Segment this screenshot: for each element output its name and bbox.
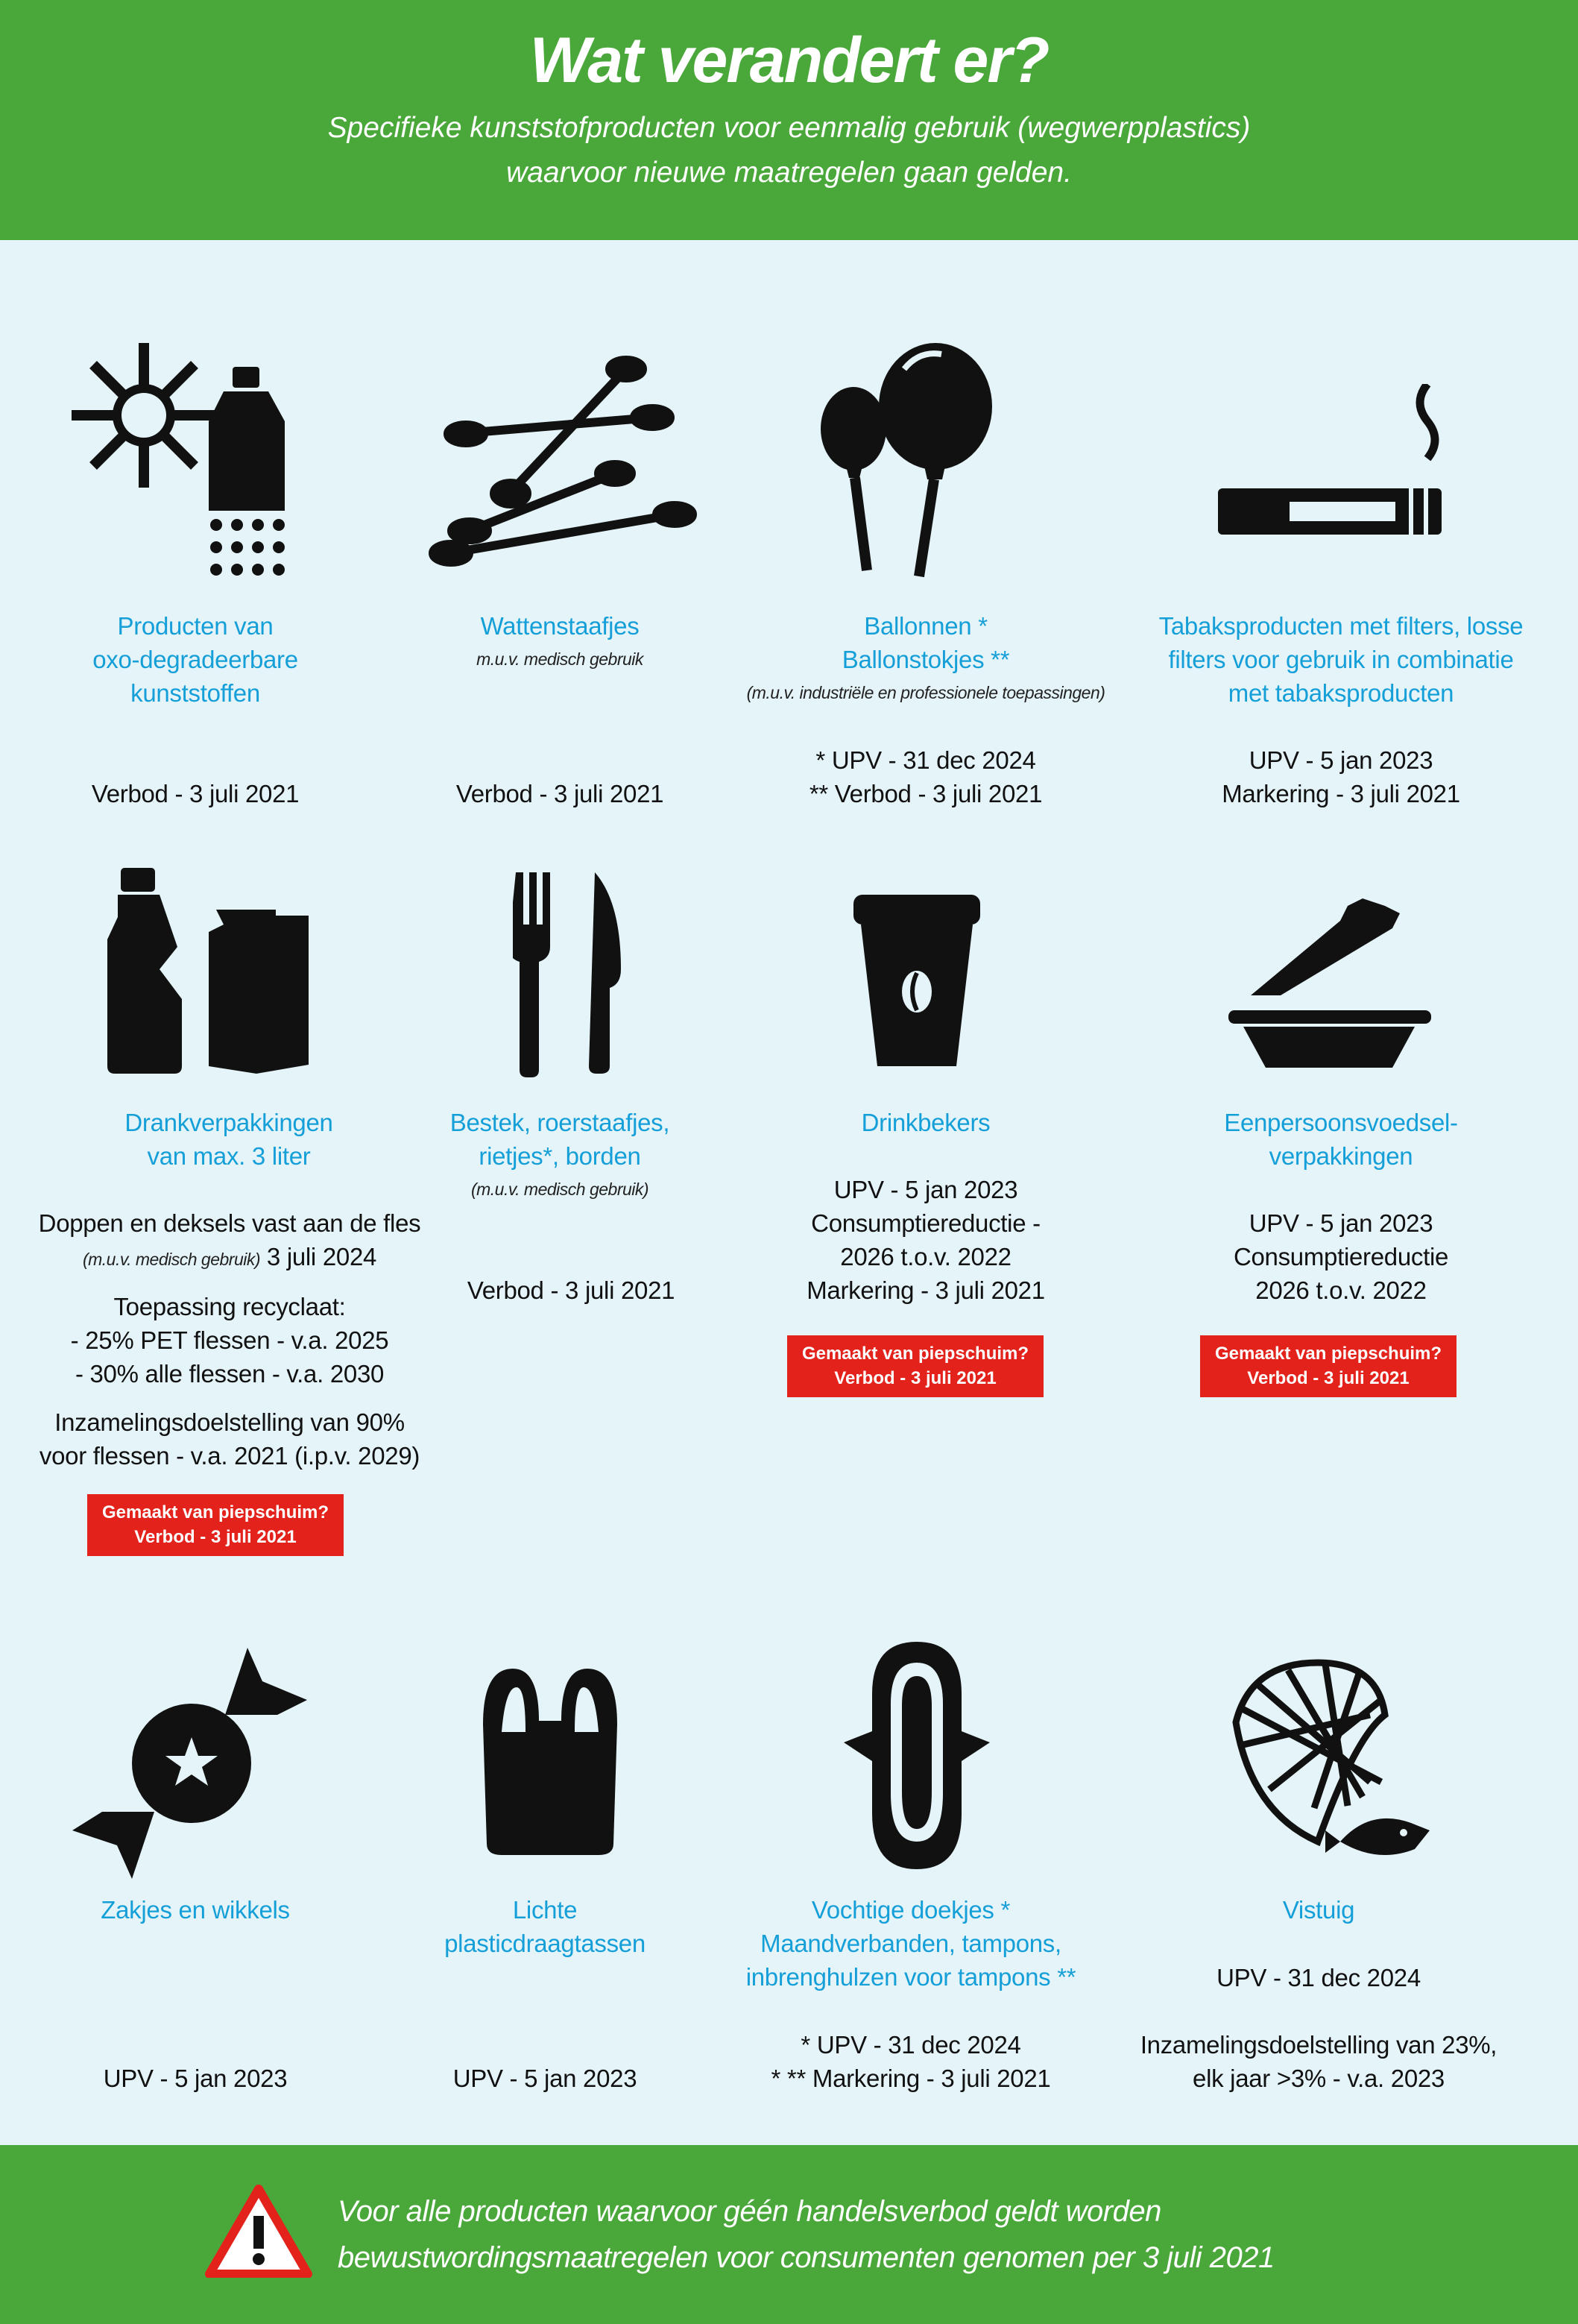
text col3 row1: Ballonnen * — [864, 612, 988, 640]
red callout col4: Verbod - 3 juli 2021 — [1247, 1368, 1410, 1388]
status col3 row1: ** Verbod - 3 juli 2021 — [809, 780, 1042, 807]
text col3 row3: inbrenghulzen voor tampons ** — [746, 1963, 1076, 1991]
icon: fork and knife — [513, 872, 621, 1077]
red callout col1 — [87, 1494, 344, 1556]
status col4 row2: UPV - 5 jan 2023 — [1249, 1209, 1433, 1237]
status col3 row2: Consumptiereductie - — [811, 1209, 1041, 1237]
text col1 row3: Zakjes en wikkels — [101, 1896, 290, 1924]
details col1 row2: Toepassing recyclaat: — [113, 1293, 346, 1320]
details col1 row2: voor flessen - v.a. 2021 (i.p.v. 2029) — [40, 1442, 420, 1470]
red callout col4 — [1200, 1335, 1457, 1397]
text col2 row1: m.u.v. medisch gebruik — [476, 649, 643, 669]
status col4 row1: UPV - 5 jan 2023 — [1249, 746, 1433, 774]
status col4 row3: UPV - 31 dec 2024 — [1216, 1964, 1421, 1991]
status col3 row2: 2026 t.o.v. 2022 — [840, 1243, 1012, 1270]
icon: food container — [1228, 898, 1431, 1068]
details col1 row2: (m.u.v. medisch gebruik) 3 juli 2024 — [83, 1243, 376, 1270]
text col3 row3: Maandverbanden, tampons, — [760, 1930, 1061, 1957]
text col1 row2: van max. 3 liter — [148, 1142, 310, 1170]
text col2 row2: (m.u.v. medisch gebruik) — [471, 1180, 648, 1199]
text col3 row3: Vochtige doekjes * — [812, 1896, 1010, 1924]
icon: candy — [72, 1648, 307, 1879]
details col1 row2: Doppen en deksels vast aan de fles — [39, 1209, 420, 1237]
icon: sun and bottle — [72, 343, 285, 576]
status col2 row3: UPV - 5 jan 2023 — [453, 2065, 637, 2092]
status col3 row2 — [807, 1176, 1045, 1304]
text col2 row3: plasticdraagtassen — [444, 1930, 646, 1957]
red callout col1: Gemaakt van piepschuim? — [102, 1502, 329, 1522]
details col1 row2: - 30% alle flessen - v.a. 2030 — [75, 1360, 384, 1388]
status col3 row2: Markering - 3 juli 2021 — [807, 1276, 1045, 1304]
text col1 row2 — [124, 1109, 333, 1170]
status col4 row2: 2026 t.o.v. 2022 — [1255, 1276, 1427, 1304]
status col3 row2: UPV - 5 jan 2023 — [834, 1176, 1017, 1203]
subtitle — [328, 112, 1250, 189]
text col2 row2: rietjes*, borden — [479, 1142, 641, 1170]
icon: cup — [853, 895, 980, 1066]
footer text: Voor alle producten waarvoor géén handelsverbod geldt worden — [338, 2195, 1161, 2228]
red callout col1: Verbod - 3 juli 2021 — [134, 1527, 297, 1547]
red callout col4: Gemaakt van piepschuim? — [1215, 1344, 1442, 1364]
status col2 row1: Verbod - 3 juli 2021 — [456, 780, 663, 807]
text col4 row2: Eenpersoonsvoedsel- — [1224, 1109, 1458, 1136]
text col1 row1: kunststoffen — [130, 679, 260, 707]
icon: sanitary pad — [844, 1642, 990, 1869]
status col1 row3: UPV - 5 jan 2023 — [104, 2065, 287, 2092]
status col3 row1 — [809, 746, 1042, 807]
footer text: bewustwordingsmaatregelen voor consumenten genomen per 3 juli 2021 — [338, 2241, 1275, 2274]
text col1 row1: Producten van — [118, 612, 273, 640]
icon: cotton swabs — [429, 356, 697, 567]
text col2 row2: Bestek, roerstaafjes, — [450, 1109, 669, 1136]
text col3 row1 — [747, 612, 1105, 702]
text col2 row1: Wattenstaafjes — [481, 612, 639, 640]
text col3 row2: Drinkbekers — [862, 1109, 990, 1136]
red callout col3: Verbod - 3 juli 2021 — [834, 1368, 997, 1388]
text col2 row1 — [476, 612, 644, 669]
text col4 row1: filters voor gebruik in combinatie — [1168, 646, 1513, 673]
text col4 row3: Vistuig — [1283, 1896, 1354, 1924]
details col1 row2: - 25% PET flessen - v.a. 2025 — [71, 1326, 388, 1354]
text col2 row3 — [444, 1896, 646, 1957]
red callout col3 — [787, 1335, 1044, 1397]
text col1 row1 — [92, 612, 298, 707]
text col4 row1 — [1159, 612, 1523, 707]
header — [0, 0, 1578, 240]
red callout col3: Gemaakt van piepschuim? — [802, 1344, 1029, 1364]
status col4 row1 — [1222, 746, 1460, 807]
icon: bottle and carton — [107, 868, 309, 1074]
subtitle: Specifieke kunststofproducten voor eenmalig gebruik (wegwerpplastics) — [328, 112, 1250, 144]
status col4 row3: Inzamelingsdoelstelling van 23%, — [1140, 2031, 1497, 2059]
text col4 row1: met tabaksproducten — [1228, 679, 1454, 707]
status col4 row1: Markering - 3 juli 2021 — [1222, 780, 1460, 807]
details col1 row2 — [39, 1209, 420, 1470]
icon: cigarette — [1218, 384, 1442, 535]
status col4 row3: elk jaar >3% - v.a. 2023 — [1193, 2065, 1445, 2092]
details col1 row2: Inzamelingsdoelstelling van 90% — [54, 1408, 405, 1436]
status col3 row3: * UPV - 31 dec 2024 — [801, 2031, 1021, 2059]
subtitle: waarvoor nieuwe maatregelen gaan gelden. — [506, 157, 1072, 189]
footer text — [338, 2195, 1275, 2274]
status col4 row2: Consumptiereductie — [1234, 1243, 1448, 1270]
text col3 row1: (m.u.v. industriële en professionele toepassingen) — [747, 683, 1105, 702]
icon: balloons — [821, 343, 992, 577]
icon: fishing net and fish — [1232, 1660, 1430, 1855]
text col4 row1: Tabaksproducten met filters, losse — [1159, 612, 1523, 640]
status col4 row3 — [1140, 1964, 1497, 2092]
text col3 row1: Ballonstokjes ** — [842, 646, 1009, 673]
footer — [0, 2145, 1578, 2324]
status col2 row2: Verbod - 3 juli 2021 — [467, 1276, 675, 1304]
status col3 row1: * UPV - 31 dec 2024 — [815, 746, 1036, 774]
status col3 row3: * ** Markering - 3 juli 2021 — [771, 2065, 1050, 2092]
text col1 row2: Drankverpakkingen — [124, 1109, 333, 1136]
text col1 row1: oxo-degradeerbare — [92, 646, 298, 673]
icon: plastic bag — [483, 1669, 617, 1855]
status col4 row2 — [1234, 1209, 1448, 1304]
text col2 row3: Lichte — [513, 1896, 577, 1924]
text col2 row2 — [450, 1109, 669, 1199]
text col4 row2: verpakkingen — [1269, 1142, 1413, 1170]
text col4 row2 — [1224, 1109, 1458, 1170]
status col1 row1: Verbod - 3 juli 2021 — [92, 780, 299, 807]
status col3 row3 — [771, 2031, 1050, 2092]
title: Wat verandert er? — [530, 25, 1048, 96]
icon: warning triangle — [205, 2185, 312, 2278]
text col3 row3 — [746, 1896, 1076, 1991]
